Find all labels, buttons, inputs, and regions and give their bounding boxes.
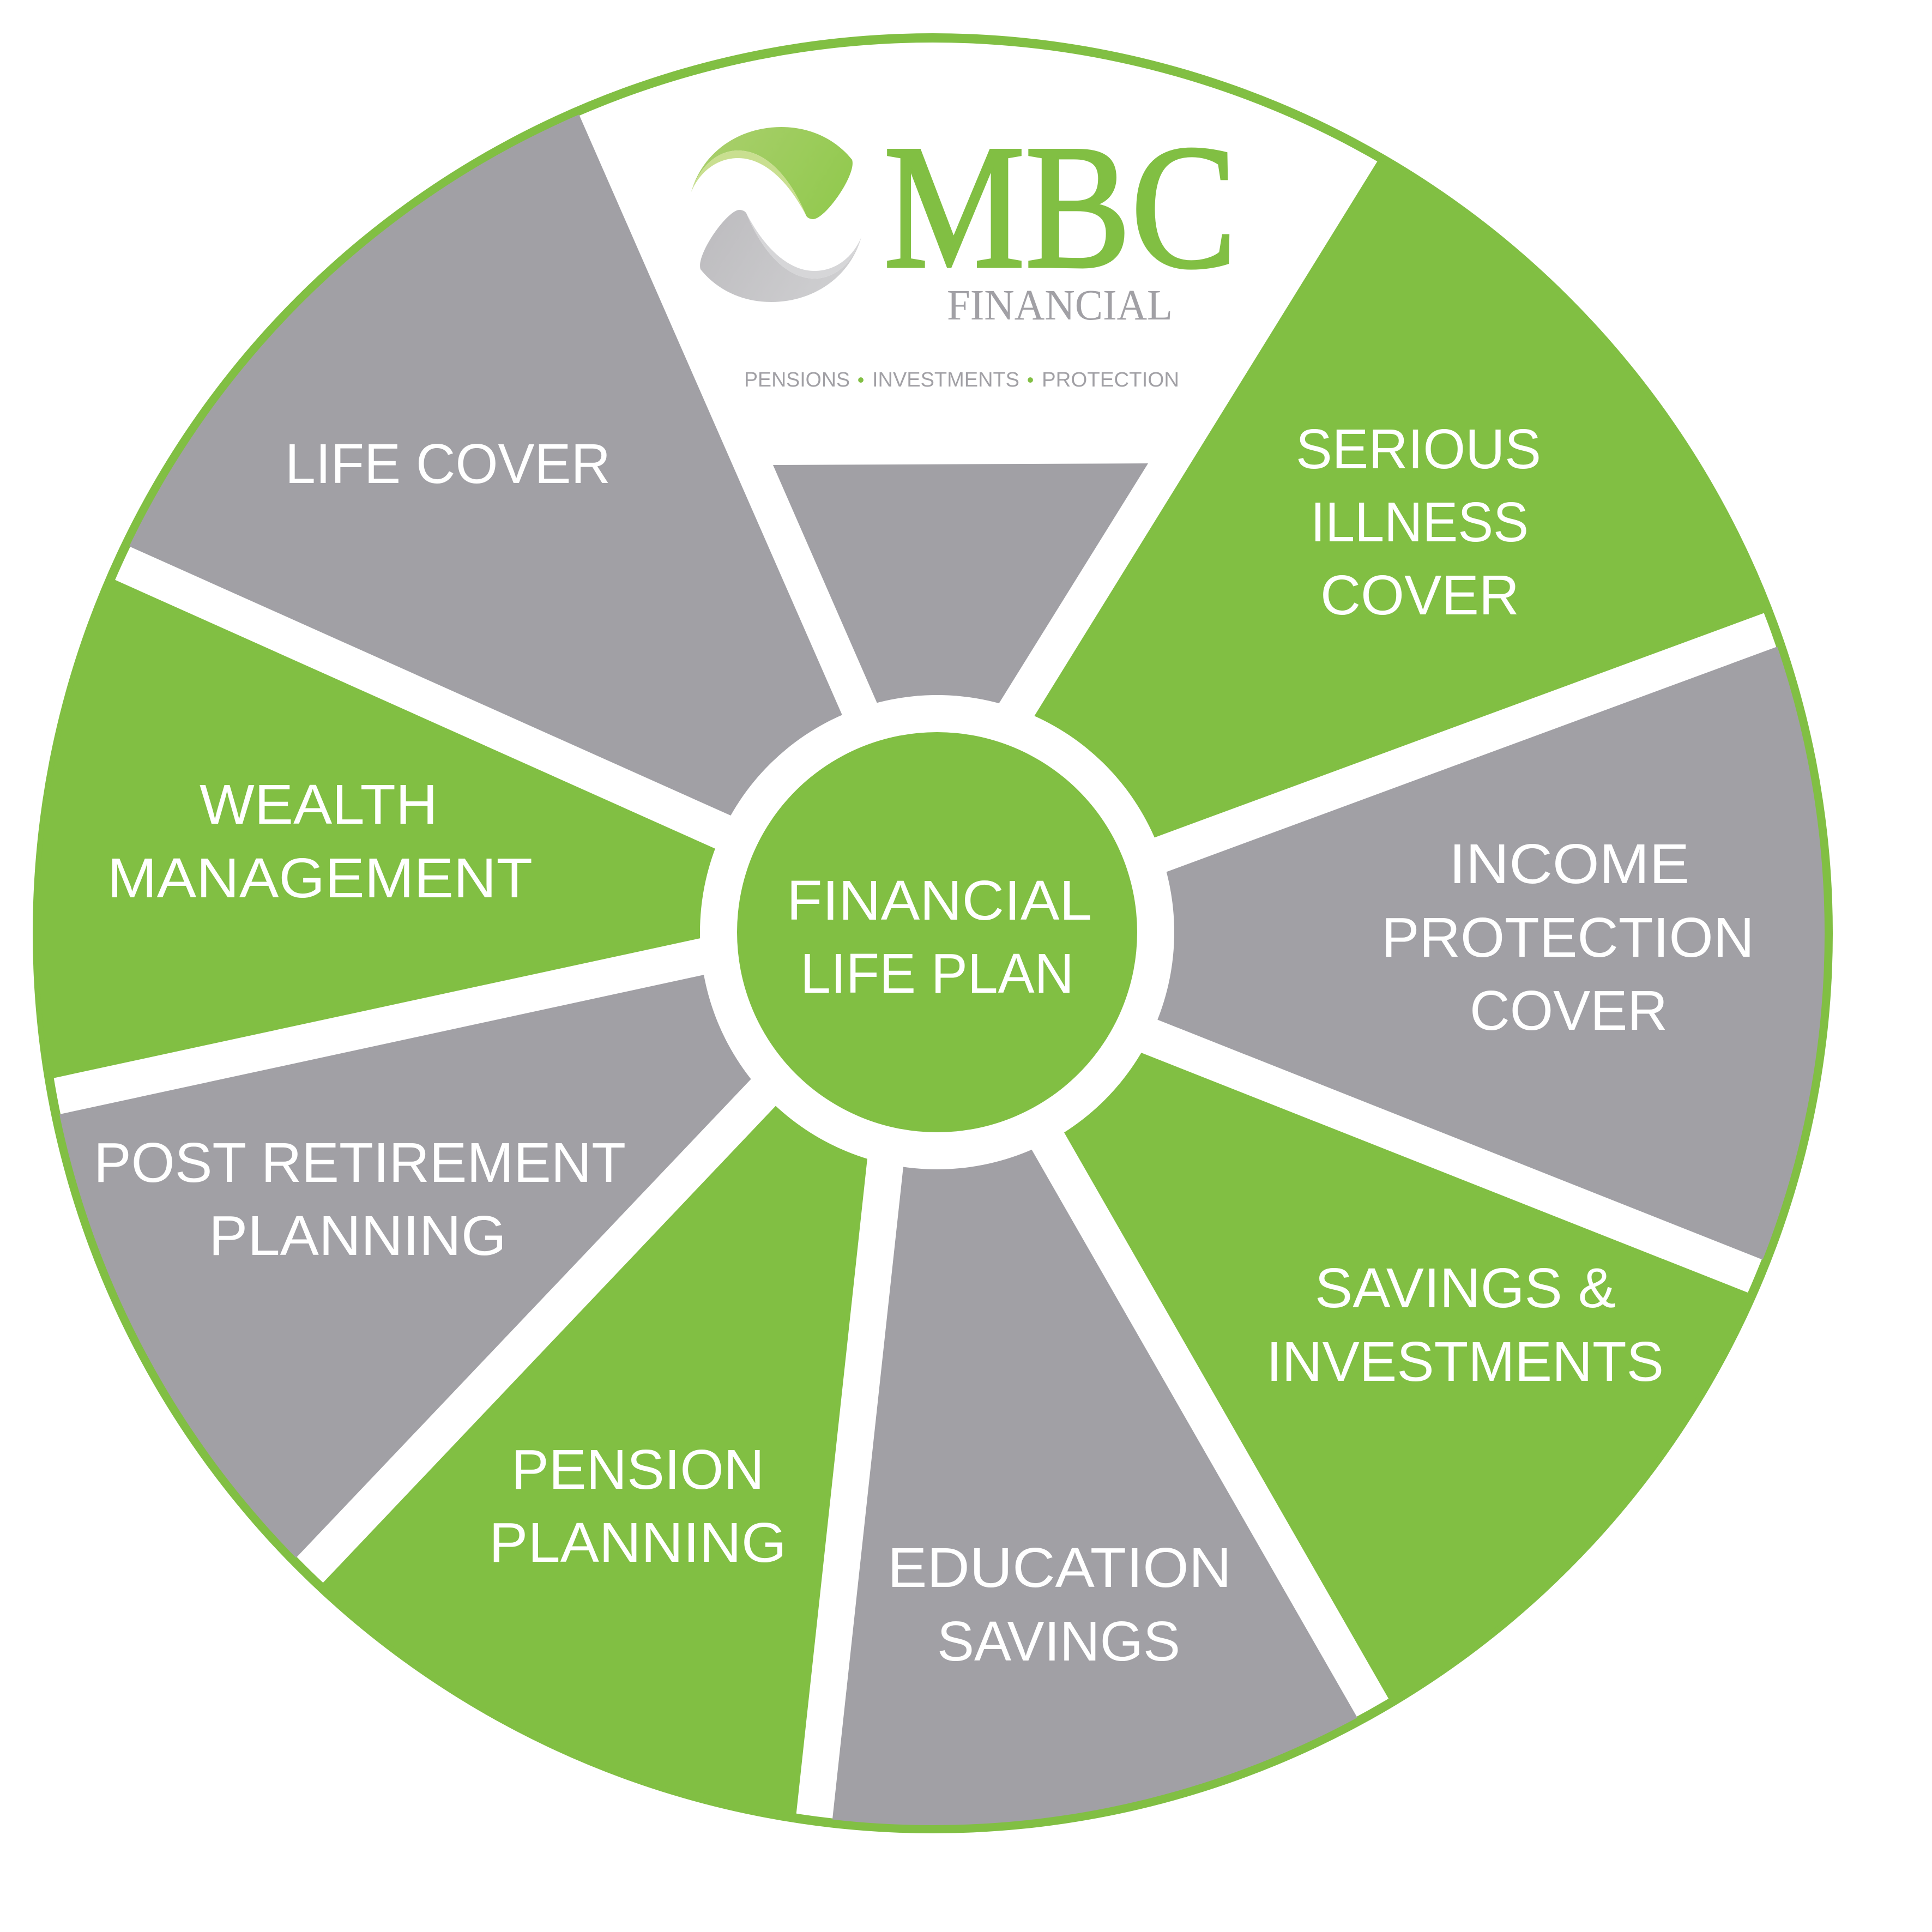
- tagline: •: [858, 369, 864, 391]
- wordmark: financial: FINANCIAL: [947, 282, 1173, 329]
- label: serious illness cover: [1296, 418, 1541, 626]
- wedge: pension planning: [321, 1106, 867, 1817]
- label: pension planning: [489, 1438, 787, 1574]
- title: financial life plan: [787, 869, 1092, 1005]
- wedge: income protection cover: [1157, 645, 1828, 1261]
- panel: life cover: [125, 111, 842, 816]
- panel: post retirement planning: [55, 975, 751, 1561]
- title: financial life plan: FINANCIAL: [787, 869, 1092, 932]
- label: post retirement planning: PLANNING: [209, 1204, 506, 1267]
- label: post retirement planning: [94, 1131, 626, 1267]
- label: education savings: [887, 1536, 1231, 1673]
- label: savings and investments: [1266, 1257, 1664, 1393]
- wedge: wealth management: [38, 578, 716, 1079]
- panel: centre circle: [737, 732, 1137, 1132]
- tagline: PROTECTION: [1042, 369, 1179, 391]
- wedge: serious illness cover: [1034, 159, 1766, 838]
- logo: [691, 108, 1237, 391]
- icon: grey swoosh: [700, 210, 861, 302]
- label: savings and investments: SAVINGS &: [1315, 1257, 1616, 1319]
- label: income protection cover: [1381, 832, 1754, 1042]
- panel: wealth management: [38, 578, 716, 1079]
- label: serious illness cover: SERIOUS: [1296, 418, 1541, 480]
- wordmark: MBC: MBC: [884, 108, 1237, 305]
- label: savings and investments: INVESTMENTS: [1266, 1330, 1664, 1393]
- label: education savings: SAVINGS: [937, 1610, 1180, 1673]
- label: wealth management: [107, 773, 533, 909]
- label: pension planning: PLANNING: [489, 1511, 787, 1574]
- panel: logo lower segment: [773, 463, 1148, 704]
- tagline: [744, 369, 1179, 391]
- label: post retirement planning: POST RETIREMENT: [94, 1131, 626, 1194]
- label: education savings: EDUCATION: [887, 1536, 1231, 1599]
- label: wealth management: WEALTH: [200, 773, 438, 836]
- wedge: savings and investments: [1064, 1052, 1750, 1701]
- panel: income protection cover: [1157, 645, 1828, 1261]
- panel: savings and investments: [1064, 1052, 1750, 1701]
- label: serious illness cover: COVER: [1320, 564, 1519, 626]
- label: income protection cover: PROTECTION: [1381, 906, 1754, 969]
- label: income protection cover: INCOME: [1449, 832, 1689, 895]
- centre disc: [737, 732, 1137, 1132]
- tagline: •: [1027, 369, 1034, 391]
- wedge: life cover: [125, 111, 842, 816]
- panel: education savings: [832, 1149, 1360, 1830]
- label: pension planning: PENSION: [511, 1438, 764, 1501]
- tagline: PENSIONS: [744, 369, 850, 391]
- wedge: education savings: [832, 1149, 1360, 1830]
- label: serious illness cover: ILLNESS: [1311, 491, 1529, 553]
- wedge: post retirement planning: [55, 975, 751, 1561]
- panel: serious illness cover: [1034, 159, 1766, 838]
- title: financial life plan: LIFE PLAN: [800, 942, 1074, 1005]
- icon: green swoosh: [691, 127, 853, 219]
- label: life cover: LIFE COVER: [285, 432, 611, 495]
- tagline: INVESTMENTS: [872, 369, 1019, 391]
- panel: pension planning: [321, 1106, 867, 1817]
- label: income protection cover: COVER: [1470, 979, 1668, 1042]
- label: wealth management: MANAGEMENT: [107, 847, 533, 909]
- hub ring: [700, 695, 1174, 1169]
